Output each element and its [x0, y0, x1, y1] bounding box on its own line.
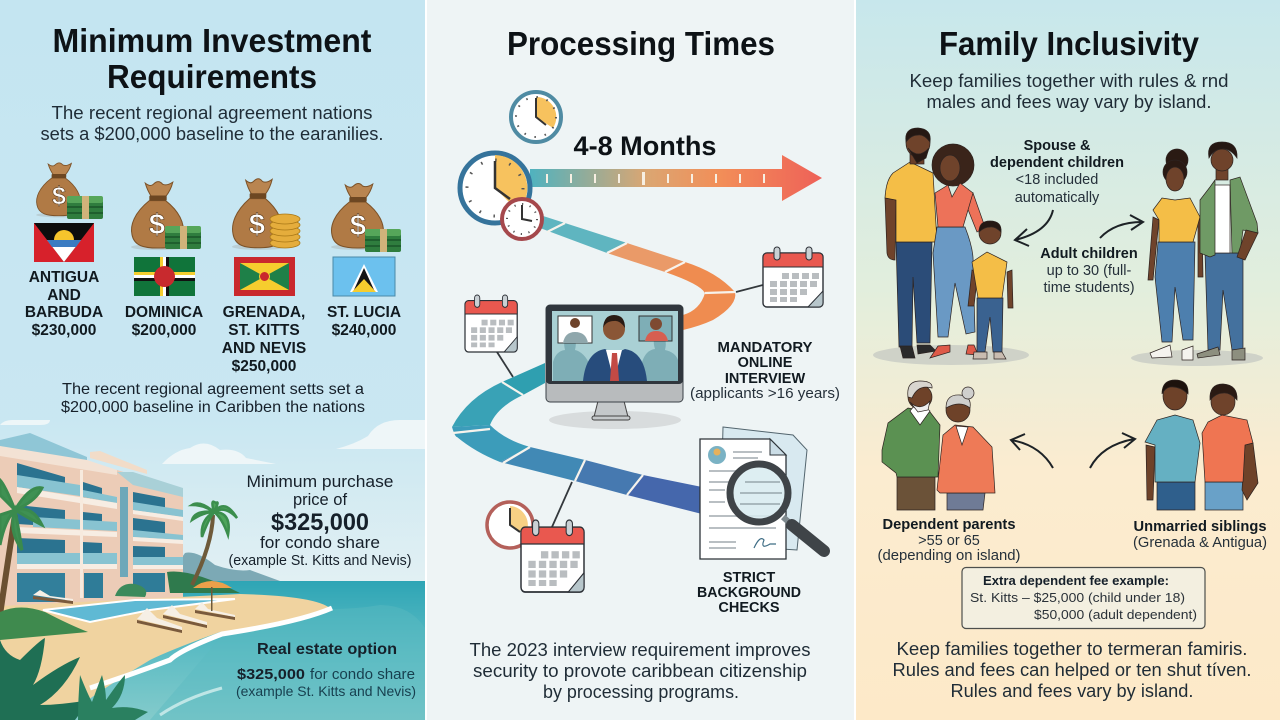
label: strict background checks	[697, 570, 801, 616]
illustration: dependent parents	[882, 381, 995, 510]
label: Grenada, St. Kitts and Nevis: $250,000	[232, 358, 296, 375]
callout: minimum purchase price: $325,000	[271, 509, 369, 536]
illustration: unmarried siblings	[1145, 380, 1258, 510]
callout: real estate option: (example St. Kitts and Nevis)	[236, 683, 416, 699]
icon: money bag with coins, Grenada: $	[249, 209, 265, 241]
icon: calendar right	[763, 247, 823, 307]
label: unmarried siblings	[1133, 519, 1267, 551]
illustration: adult children	[1131, 142, 1263, 366]
text: interview requirement note: by processing programs.	[543, 682, 739, 702]
label: strict background checks: STRICT	[723, 570, 775, 586]
title: processing times: Processing Times	[507, 25, 775, 62]
label: mandatory online interview: (applicants >16 years)	[690, 386, 840, 402]
flag: Antigua and Barbuda	[34, 223, 94, 262]
arrow: timeline	[530, 155, 822, 201]
callout: minimum purchase price	[228, 473, 412, 569]
label: Antigua and Barbuda: BARBUDA	[25, 304, 103, 321]
label: strict background checks: BACKGROUND	[697, 585, 801, 601]
text: spouse and dependent children: automatically	[1015, 190, 1100, 206]
chart: winding timeline road	[452, 215, 735, 514]
label: Antigua and Barbuda	[25, 269, 103, 339]
callout: real estate option: for condo share	[310, 666, 415, 683]
label: St. Lucia	[327, 304, 401, 339]
text: closing note: Keep families together to termeran famiris.	[896, 639, 1248, 659]
text: closing note: Rules and fees vary by island.	[950, 681, 1194, 701]
icon: small clock top	[511, 92, 561, 142]
label: Dominica: $200,000	[132, 322, 196, 339]
label: Grenada, St. Kitts and Nevis	[222, 304, 306, 375]
text: spouse and dependent children: dependent children	[990, 155, 1124, 171]
intro text: The recent regional agreement nations	[52, 103, 372, 123]
callout: minimum purchase price: price of	[293, 491, 347, 509]
label: Grenada, St. Kitts and Nevis: ST. KITTS	[228, 322, 300, 339]
text: interview requirement note	[470, 640, 810, 702]
intro text	[910, 71, 1228, 112]
label: dependent parents: >55 or 65	[918, 533, 980, 549]
note: regional agreement baseline: $200,000 baseline in Caribben the nations	[61, 399, 365, 416]
icon: money bag with cash, Dominica: $	[149, 209, 165, 241]
text: interview requirement note: The 2023 interview requirement improves	[470, 640, 810, 660]
label: St. Lucia: ST. LUCIA	[327, 304, 401, 321]
label: unmarried siblings: Unmarried siblings	[1134, 519, 1266, 535]
icon: money bag with cash, St. Lucia: $	[350, 210, 366, 242]
label: strict background checks: CHECKS	[718, 600, 780, 616]
note: regional agreement baseline: The recent regional agreement setts set a	[62, 381, 364, 398]
callout: minimum purchase price: for condo share	[260, 534, 380, 552]
icon: money bag with coins, Grenada	[232, 179, 300, 250]
intro text: sets a $200,000 baseline to the earanilies.	[40, 124, 384, 144]
icon: money bag with cash, Antigua	[36, 163, 103, 219]
title: family inclusivity: Family Inclusivity	[939, 25, 1200, 62]
icon: money bag with cash, Antigua: $	[52, 182, 66, 210]
label: Antigua and Barbuda: AND	[47, 287, 81, 304]
icon: money bag with cash, Dominica	[131, 182, 201, 250]
flag: Dominica	[134, 257, 195, 296]
illustration: beach resort	[0, 420, 425, 720]
label: unmarried siblings: (Grenada & Antigua)	[1133, 535, 1267, 551]
label: mandatory online interview: INTERVIEW	[725, 371, 805, 387]
intro text	[40, 103, 384, 144]
arrow: to dependent parents	[1011, 434, 1053, 468]
palm tree: centre	[192, 502, 237, 585]
label: Antigua and Barbuda: $230,000	[32, 322, 96, 339]
callout: extra dependent fee	[962, 568, 1205, 628]
illustration: parents with child	[873, 128, 1029, 365]
text: interview requirement note: security to provote caribbean citizenship	[473, 661, 807, 681]
icon: small red clock	[502, 199, 542, 239]
label: Dominica	[125, 304, 203, 339]
note: regional agreement baseline	[61, 381, 365, 416]
callout: real estate option: $325,000	[237, 666, 305, 683]
label: mandatory online interview: ONLINE	[738, 355, 793, 371]
panel: minimum investment requirements	[0, 0, 425, 720]
label: dependent parents	[878, 517, 1020, 564]
building: condo	[0, 433, 183, 610]
text: adult children: Adult children	[1040, 246, 1138, 262]
icon: large clock	[460, 153, 530, 223]
text: adult children	[1040, 246, 1138, 296]
intro text: males and fees way vary by island.	[926, 92, 1212, 112]
callout: real estate option: Real estate option	[257, 641, 397, 658]
intro text: Keep families together with rules & rnd	[910, 71, 1228, 91]
text: spouse and dependent children: <18 included	[1016, 172, 1098, 188]
icon: background check documents with magnifier	[700, 427, 824, 559]
palm tree: left	[0, 480, 42, 615]
text: closing note: Rules and fees can helped or ten shut tíven.	[892, 660, 1252, 680]
pool	[43, 599, 235, 622]
arrow: to adult children	[1100, 215, 1143, 238]
label: dependent parents: Dependent parents	[882, 517, 1016, 533]
icon: money bag with cash, St. Lucia	[331, 184, 401, 252]
flag: Grenada	[234, 257, 295, 296]
text: spouse and dependent children: Spouse &	[1024, 138, 1091, 154]
label: mandatory online interview: MANDATORY	[718, 340, 813, 356]
label: Grenada, St. Kitts and Nevis: AND NEVIS	[222, 340, 306, 357]
umbrella	[193, 581, 232, 611]
icon: calendar bottom	[521, 520, 584, 592]
callout: minimum purchase price: (example St. Kitts and Nevis)	[228, 553, 412, 569]
callout: real estate option	[236, 641, 416, 699]
title: minimum investment requirements	[52, 22, 372, 95]
label: dependent parents: (depending on island)	[878, 548, 1020, 564]
connector lines	[497, 285, 763, 527]
arrow: to unmarried siblings	[1090, 433, 1135, 468]
callout: extra dependent fee: $50,000 (adult dependent)	[1034, 607, 1197, 622]
label: Antigua and Barbuda: ANTIGUA	[29, 269, 99, 286]
label: mandatory online interview	[690, 340, 840, 402]
label: Grenada, St. Kitts and Nevis: GRENADA,	[223, 304, 305, 321]
title: minimum investment requirements: Minimum Investment	[52, 22, 372, 59]
arrow: to parents with child	[1015, 210, 1053, 246]
text: closing note	[892, 639, 1252, 701]
callout: extra dependent fee: Extra dependent fee example:	[983, 574, 1169, 588]
icon: calendar left	[465, 295, 517, 352]
flag: St. Lucia	[333, 257, 395, 296]
label: Dominica: DOMINICA	[125, 304, 203, 321]
icon: clock behind calendar	[487, 502, 533, 548]
callout: minimum purchase price: Minimum purchase	[246, 473, 394, 491]
panel: processing times	[427, 0, 854, 720]
label: St. Lucia: $240,000	[332, 322, 396, 339]
sun lounger group	[33, 590, 235, 633]
label: 4-8 months: 4-8 Months	[574, 131, 716, 161]
text: adult children: up to 30 (full-	[1047, 263, 1131, 279]
foreground leaves	[0, 638, 148, 720]
text: spouse and dependent children	[990, 138, 1124, 206]
icon: monitor with video interview	[546, 305, 683, 429]
callout: extra dependent fee: St. Kitts – $25,000 (child under 18)	[970, 590, 1185, 605]
title: minimum investment requirements: Requirements	[107, 58, 317, 95]
text: adult children: time students)	[1043, 280, 1135, 296]
panel: family inclusivity	[856, 0, 1280, 720]
